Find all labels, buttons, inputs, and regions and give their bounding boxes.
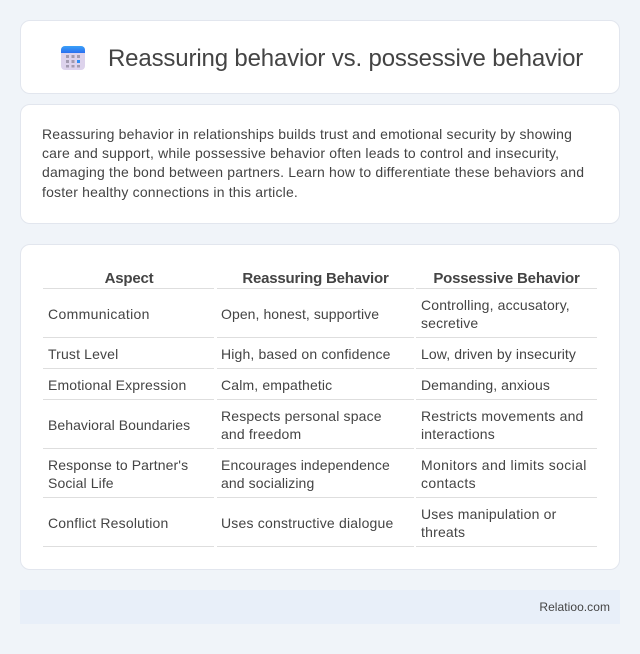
panel: comparison table: Uses manipulation or (421, 506, 557, 522)
row: response to partner's social life: Response to Partner's (48, 457, 188, 473)
panel: comparison table: Calm, empathetic (221, 377, 332, 393)
panel: comparison table: Open, honest, supportive (221, 306, 379, 322)
icon: calendar (61, 46, 85, 70)
row: conflict resolution: Conflict Resolution (48, 515, 169, 531)
panel: introduction (20, 104, 620, 224)
panel: comparison table: threats (421, 524, 465, 540)
panel: comparison table (20, 244, 620, 570)
panel: comparison table: Low, driven by insecurity (421, 346, 576, 362)
row: behavioral boundaries: Behavioral Boundaries (48, 417, 190, 433)
panel: comparison table: and socializing (221, 475, 314, 491)
row: response to partner's social life: Social Life (48, 475, 114, 491)
row: emotional expression: Emotional Expression (48, 377, 186, 393)
title: Reassuring behavior vs. possessive behavior (108, 45, 583, 72)
text block: introduction (42, 126, 584, 200)
text block: introduction: Reassuring behavior in relationships builds trust and emotional security by showing (42, 126, 572, 142)
panel: comparison table: Respects personal space (221, 408, 382, 424)
table header: aspect: Aspect (105, 270, 153, 287)
footer bar (20, 590, 620, 624)
row: response to partner's social life (48, 457, 188, 491)
text block: introduction: care and support, while possessive behavior often leads to control and insecurity, (42, 145, 559, 161)
panel: comparison table: Monitors and limits social (421, 457, 587, 473)
row: trust level: Trust Level (48, 346, 118, 362)
panel: comparison table: High, based on confidence (221, 346, 391, 362)
panel: comparison table: Restricts movements and (421, 408, 584, 424)
panel: title card (20, 20, 620, 94)
table header: reassuring behavior: Reassuring Behavior (242, 270, 389, 287)
panel: comparison table: secretive (421, 315, 478, 331)
panel: comparison table: Uses constructive dialogue (221, 515, 394, 531)
footer credit: Relatioo.com (539, 600, 610, 614)
panel: comparison table: Encourages independence (221, 457, 390, 473)
row: communication: Communication (48, 306, 150, 322)
text block: introduction: foster healthy connections in this article. (42, 184, 298, 200)
text block: introduction: damaging the bond between partners. Learn how to differentiate these behaviors and (42, 164, 584, 180)
panel: comparison table: contacts (421, 475, 476, 491)
panel: comparison table: Controlling, accusatory, (421, 297, 570, 313)
panel: comparison table: interactions (421, 426, 495, 442)
panel: comparison table: Demanding, anxious (421, 377, 550, 393)
table header: possessive behavior: Possessive Behavior (433, 270, 580, 287)
panel: comparison table: and freedom (221, 426, 301, 442)
